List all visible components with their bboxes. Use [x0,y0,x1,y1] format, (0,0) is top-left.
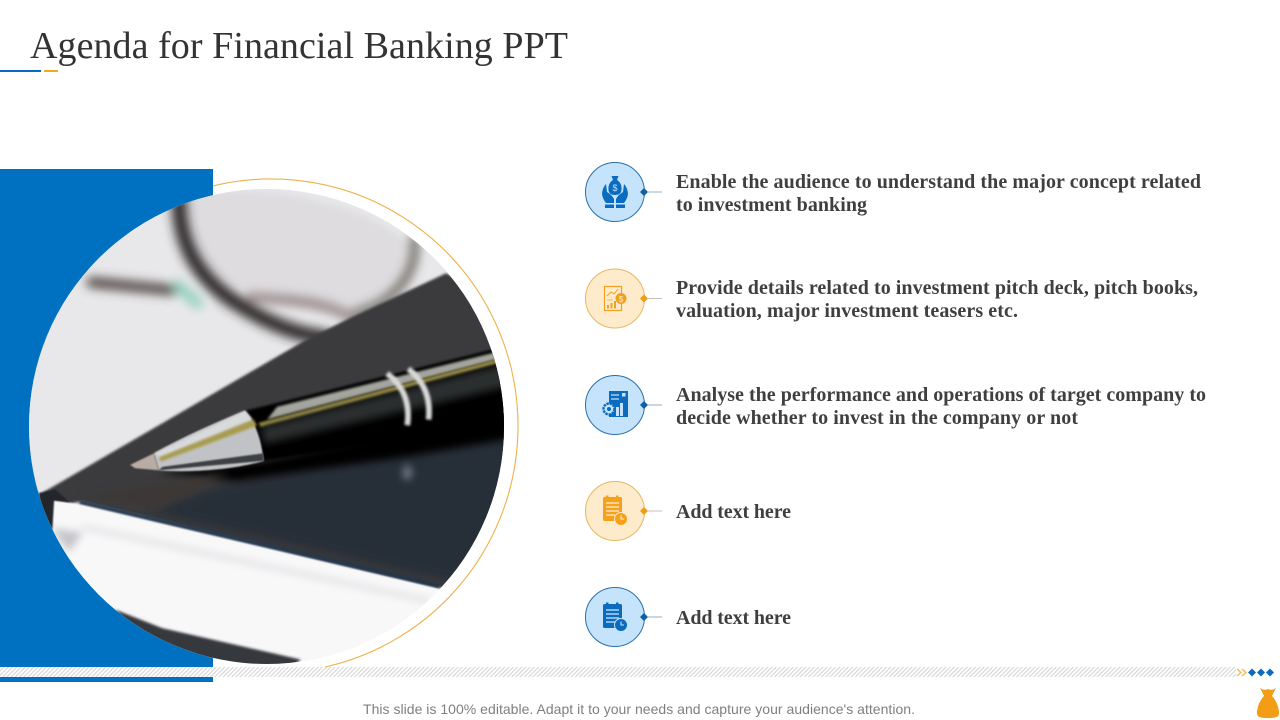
icon circle 1 [586,162,644,222]
agenda item 5 [586,588,791,646]
connector 2 [640,294,662,302]
text 2: Provide details related to investment pitch deck, pitch books, [676,277,1198,299]
text 2 [676,277,1198,322]
agenda item 3 [586,376,1206,434]
connector 4 [640,507,662,515]
icon: footer money bag [1257,688,1279,718]
text 1: to investment banking [676,194,867,216]
orange ring around photo [213,179,518,667]
text 5: Add text here [676,607,791,629]
icon: money bag in hands [602,176,628,208]
photo cone shadow [159,453,264,470]
agenda item 4 [586,482,791,540]
photo paper background [29,195,213,492]
photo cover shadow under pen [165,393,504,485]
footer hatched band [0,667,1236,677]
icon: money bag in hands: $ [612,183,618,193]
photo white pages [45,500,440,662]
photo pen rings [387,369,429,425]
photo notebook cover [42,273,541,599]
photo cover brown reflection [120,471,226,502]
photo pen dark band [261,363,507,444]
photo cover sheen [403,465,412,480]
footer note: This slide is 100% editable. Adapt it to your needs and capture your audience's attention. [363,701,915,717]
photo glasses lens [188,190,414,312]
photo pen tip [130,453,159,470]
agenda item 1 [586,162,1201,222]
icon circle 5 [586,588,644,646]
text 4: Add text here [676,501,791,523]
icon: clipboard with clock blue [603,602,628,632]
photo cover lower navy [156,432,504,584]
photo page corner shadow [51,528,83,552]
icon: clipboard with clock [603,496,628,526]
text 2: valuation, major investment teasers etc. [676,300,1018,322]
icon circle 2 [586,269,644,328]
photo notebook edge [79,502,439,587]
icon: financial report: $ [619,294,624,304]
connector 3 [640,401,662,409]
photo pen upper silver band [267,352,497,420]
photo spine corner [39,490,69,530]
photo page shading [81,527,429,601]
blue strip under band [0,677,213,682]
photo cone gold line [159,420,257,461]
photo pen body [245,344,514,461]
title accent lines [0,70,58,72]
text 3 [676,384,1206,429]
connector 5 [640,613,662,621]
photo lower dark strip [114,608,302,664]
icon: analytics with gear [604,391,628,417]
agenda item 2 [586,269,1198,328]
photo glasses frame [91,201,415,337]
icon circle 3 [586,376,644,434]
footer chevrons and diamonds [1237,668,1274,676]
panel: blue backdrop [0,169,213,667]
title: Agenda for Financial Banking PPT [30,25,568,67]
text 3: Analyse the performance and operations of target company to [676,384,1206,406]
photo pen cone [154,411,264,471]
photo cone highlight [155,411,253,457]
icon: financial report [604,286,626,310]
connector 1 [640,188,662,196]
photo: pen on notebook with glasses [29,189,504,664]
text 1 [676,171,1201,216]
photo pen gold line [259,359,497,427]
text 3: decide whether to invest in the company or not [676,407,1078,429]
text 1: Enable the audience to understand the major concept related [676,171,1201,193]
icon circle 4 [586,482,644,540]
